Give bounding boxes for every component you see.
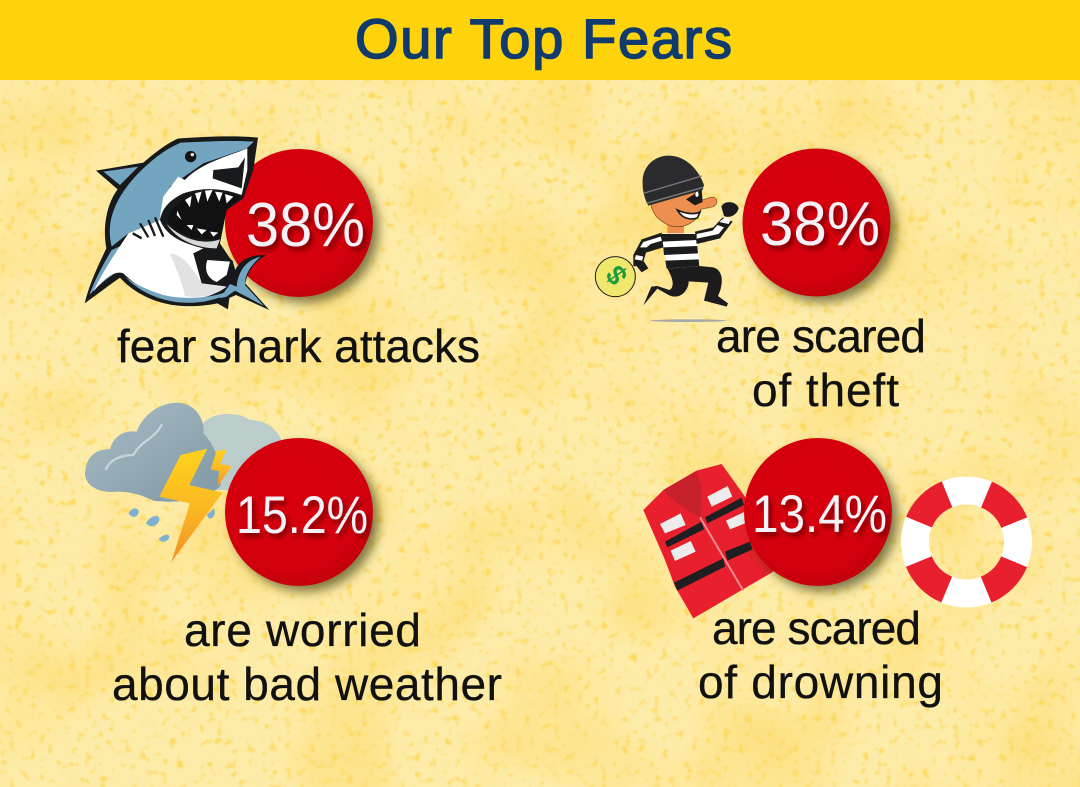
stat: 13.4%: 13.4%: [752, 485, 887, 544]
title: Our Top Fears: [355, 7, 732, 70]
caption: are scared of theft: are scared: [716, 310, 926, 362]
icon: storm cloud: [85, 403, 283, 562]
caption: are scared of drowning: of drowning: [698, 656, 943, 708]
stat: 38%: 38%: [246, 191, 365, 260]
caption: are scared of theft: of theft: [752, 364, 899, 416]
header banner: [0, 0, 1080, 80]
icon: shark: [85, 136, 269, 310]
stat: 38%: 38%: [760, 190, 880, 259]
stat: 15.2%: 15.2%: [236, 486, 368, 545]
caption: fear shark attacks: fear shark attacks: [117, 320, 480, 372]
caption: are worried about bad weather: [112, 604, 502, 710]
caption: are worried about bad weather: about bad weather: [112, 658, 502, 710]
red stat disc: drowning: [744, 438, 892, 586]
caption: are scared of theft: [716, 310, 926, 416]
red stat disc: weather: [225, 438, 373, 586]
icon: life vest: [643, 464, 773, 618]
caption: are scared of drowning: [698, 602, 943, 708]
red stat disc: theft: [742, 148, 890, 296]
panel: drowning: [643, 438, 1034, 708]
icon: running thief: $: [599, 260, 634, 291]
red stat disc: shark: [225, 149, 373, 297]
caption: are worried about bad weather: are worried: [184, 604, 421, 656]
panel: bad weather: [85, 403, 502, 710]
panel: theft: [595, 148, 926, 416]
panel: shark attacks: [85, 136, 480, 372]
icon: running thief: [595, 156, 739, 322]
caption: are scared of drowning: are scared: [712, 602, 921, 654]
icon: life ring: [899, 475, 1034, 609]
